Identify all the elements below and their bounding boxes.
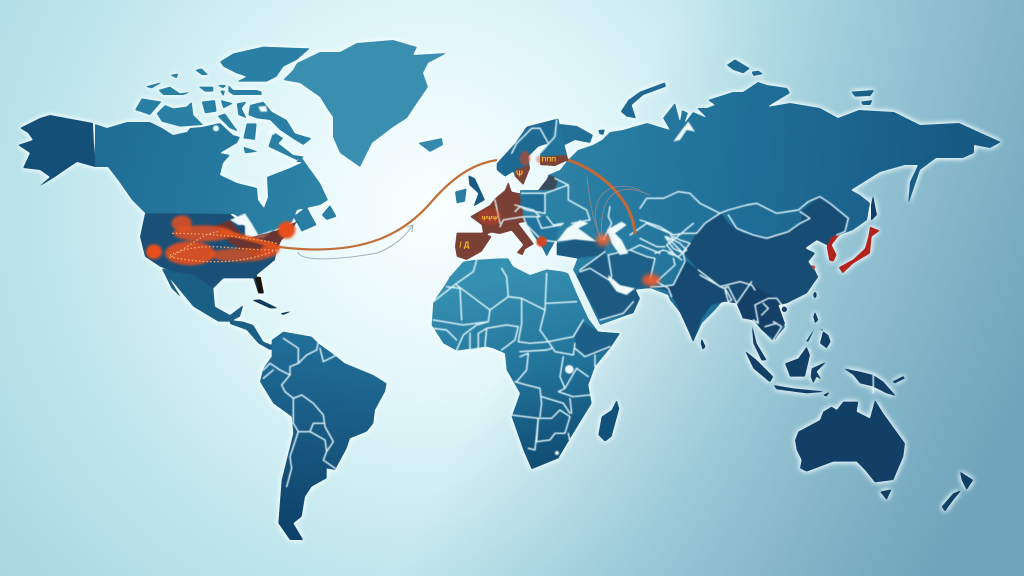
Black Sea [557, 220, 597, 242]
Sumatra [745, 351, 773, 382]
glow patches over the United States [146, 215, 295, 265]
Europe overlay glows and labels [459, 151, 556, 249]
Java and Lesser Sunda [773, 385, 827, 393]
Middle East borders [580, 207, 693, 320]
Iceland [418, 138, 443, 152]
Caucasus glow [596, 234, 610, 246]
Central America [230, 320, 287, 350]
Nova Scotia [293, 207, 317, 232]
United States [140, 213, 297, 293]
Africa borders [433, 260, 610, 450]
Malay Peninsula [752, 323, 767, 361]
Great Britain [468, 175, 485, 207]
arc: Finland to Caspian [568, 160, 635, 234]
Mexico [162, 268, 243, 322]
Asia mainland [520, 82, 1001, 342]
Europe borders [495, 120, 590, 242]
South America borders [263, 338, 337, 487]
Ireland [455, 188, 467, 203]
Hispaniola [280, 311, 293, 315]
Baltic states dark [538, 175, 558, 190]
Lesotho [555, 451, 559, 455]
Shanghai highlight [812, 265, 816, 271]
dotted flow routes [168, 232, 277, 262]
Newfoundland [322, 205, 337, 220]
Arctic islands [135, 47, 312, 160]
Southeast Asia and Oceania [701, 292, 973, 512]
arc: United States to Europe [279, 160, 497, 250]
Madagascar [598, 400, 619, 442]
Asia borders [640, 192, 848, 340]
New Britain [892, 376, 905, 383]
band of orange flow [220, 232, 280, 248]
Sulawesi [811, 362, 827, 383]
Norway and Sweden [497, 118, 558, 185]
Korea highlighted [827, 235, 839, 262]
Europe red glows [478, 151, 547, 247]
New Zealand [942, 472, 973, 512]
Novaya Zemlya [621, 82, 666, 118]
yellow labels in Europe [459, 157, 556, 249]
brown tint over the eastern states [213, 220, 297, 257]
New Guinea [843, 368, 896, 396]
Pakistan glow [642, 274, 660, 286]
Kola peninsula [560, 124, 593, 145]
yellow labels in Europe: Ψ [516, 169, 523, 179]
Caspian Sea [607, 222, 628, 255]
Finland [540, 118, 568, 166]
Sweden highlight [515, 165, 530, 185]
New Guinea border [872, 375, 874, 393]
Cuba [252, 299, 278, 308]
East and South Asia regions [640, 192, 880, 361]
Borneo [785, 347, 810, 377]
thin arcs toward Caucasus [587, 177, 650, 240]
Western Europe highlighted [470, 182, 534, 255]
Greenland [283, 40, 447, 167]
Persian Gulf [608, 275, 635, 295]
USA heat overlay [146, 215, 297, 265]
Sakhalin [871, 195, 877, 221]
Africa [432, 258, 620, 469]
Ob gulf [673, 122, 695, 142]
Poland [520, 193, 545, 213]
thin grey arrow [298, 225, 413, 259]
India and Pakistan [650, 260, 752, 342]
Philippines [806, 312, 831, 348]
Russian Arctic islands [598, 59, 763, 142]
Lake Victoria [565, 365, 574, 374]
Florida dark tip [255, 277, 264, 293]
Tasmania [880, 489, 892, 500]
Baja California [162, 268, 182, 298]
Middle East regions [557, 207, 693, 320]
Hainan [782, 307, 787, 312]
United States, Mexico and Central America [140, 205, 337, 350]
Europe [455, 118, 590, 260]
Alaska [18, 115, 95, 188]
China [683, 197, 848, 303]
Iran and Arabia dark [577, 252, 640, 320]
Finland highlight [540, 155, 568, 166]
Iberia highlighted [455, 233, 492, 260]
Ethiopia and Horn darker [575, 322, 620, 357]
Japan highlighted [839, 227, 880, 273]
Taiwan [813, 292, 817, 298]
yellow labels in Europe: / Д [459, 240, 470, 249]
yellow labels in Europe: ΨΨΨ [482, 216, 498, 223]
Canada mainland [95, 122, 328, 235]
Timor [823, 392, 830, 397]
yellow labels in Europe: ΠΠΠ [542, 157, 556, 164]
Australia [795, 400, 905, 482]
South America [260, 332, 387, 540]
Sri Lanka [701, 338, 706, 350]
Turkey [557, 239, 607, 258]
Great Lakes [230, 213, 273, 238]
Indochina [737, 285, 787, 340]
Balkans [523, 217, 558, 257]
